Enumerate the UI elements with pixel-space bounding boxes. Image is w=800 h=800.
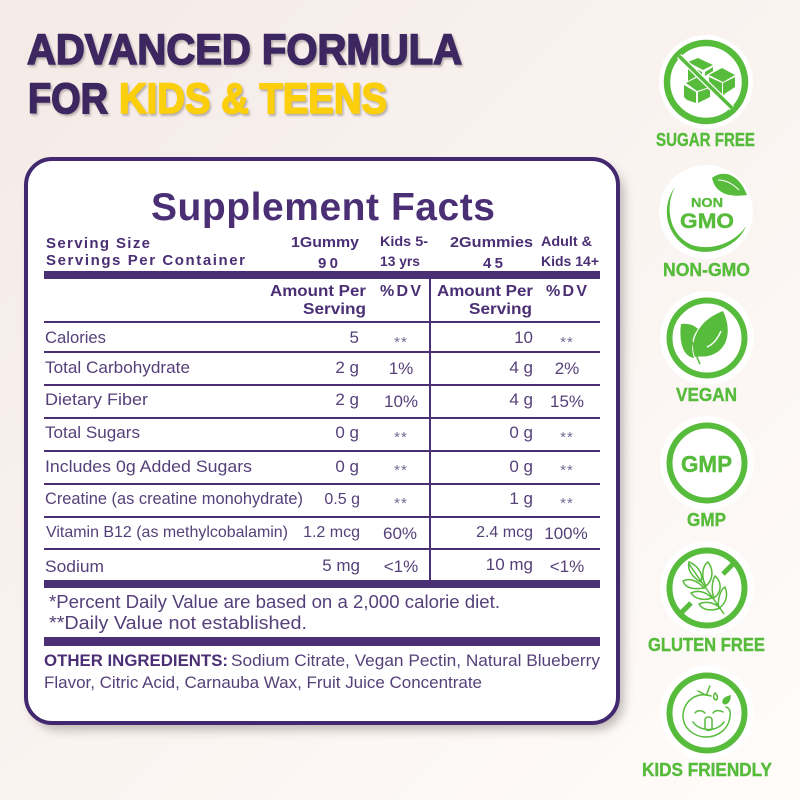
other ingredients: Sodium Citrate, Vegan Pectin, Natural Blueberry: [231, 651, 600, 670]
table rows: <1%: [384, 557, 418, 576]
table rows: **: [394, 495, 408, 512]
table rows: 4 g: [509, 358, 533, 377]
swoosh ring: [667, 187, 746, 252]
table rows: **: [560, 462, 574, 479]
title: FOR: [30, 77, 110, 125]
table rows: 1.2 mcg: [303, 524, 360, 541]
table rows: Total Carbohydrate: [45, 358, 190, 377]
icon: sugar cubes: [684, 58, 735, 103]
table rows: **: [394, 334, 408, 351]
column headers: Amount Per: [270, 283, 366, 300]
table rows: **: [560, 495, 574, 512]
panel: supplement facts: [26, 159, 624, 730]
serving header: 2Gummies: [450, 234, 533, 251]
label: NON-GMO: [663, 260, 750, 280]
table rows: 2 g: [335, 358, 359, 377]
serving header: [46, 233, 599, 272]
serving header: Adult &: [541, 233, 592, 249]
table rows: 60%: [383, 524, 417, 543]
table rows: 1 g: [509, 489, 533, 508]
serving header: 13 yrs: [380, 253, 420, 269]
title: ADVANCED FORMULA: [27, 26, 462, 74]
table rows: 0 g: [509, 423, 533, 442]
icon: baby face: [683, 686, 730, 737]
table rows: **: [394, 429, 408, 446]
serving header: Serving Size: [46, 235, 150, 252]
icon: leaves: [693, 311, 728, 357]
badge: sugar free: [656, 35, 755, 150]
table rows: 2.4 mcg: [476, 524, 533, 541]
table rows: 1%: [389, 359, 413, 378]
badge: non-gmo: GMO: [680, 210, 734, 233]
table rows: Creatine (as creatine monohydrate): [45, 489, 303, 508]
table rows: <1%: [550, 557, 584, 576]
table rows: 0.5 g: [324, 491, 360, 508]
label: GLUTEN FREE: [648, 635, 765, 655]
table rows: 0 g: [509, 457, 533, 476]
label: GMP: [687, 510, 726, 530]
serving header: Servings Per Container: [46, 252, 245, 269]
label: VEGAN: [676, 385, 737, 405]
column headers: [270, 283, 587, 318]
table rows: Dietary Fiber: [45, 390, 148, 409]
table rows: Total Sugars: [45, 423, 140, 442]
table rows: Sodium: [45, 557, 104, 576]
table rows: 0 g: [335, 423, 359, 442]
table rows: 4 g: [509, 390, 533, 409]
label: KIDS FRIENDLY: [642, 760, 772, 780]
serving header: Kids 14+: [541, 253, 599, 269]
other ingredients: OTHER INGREDIENTS:: [44, 651, 228, 670]
table rows: [45, 328, 588, 576]
title: ADVANCED FORMULA: [28, 28, 464, 76]
other ingredients: Flavor, Citric Acid, Carnauba Wax, Fruit Juice Concentrate: [44, 673, 482, 692]
column headers: Serving: [303, 301, 366, 318]
badge: non-gmo: [659, 165, 753, 280]
footnotes: **Daily Value not established.: [49, 613, 307, 633]
badge: kids friendly: [642, 666, 772, 780]
label: SUGAR FREE: [656, 130, 755, 150]
footnotes: [49, 592, 500, 633]
table rows: 2 g: [335, 390, 359, 409]
badge: non-gmo: NON: [691, 195, 723, 210]
title: [27, 26, 464, 125]
icon: wheat: [683, 562, 727, 614]
table rows: 5 mg: [322, 556, 360, 575]
column headers: %DV: [546, 283, 587, 300]
title: KIDS & TEENS: [119, 75, 387, 123]
table rows: 15%: [550, 392, 584, 411]
badge: gluten free: [648, 541, 765, 655]
table rules: [44, 271, 600, 646]
table rows: 100%: [544, 524, 588, 543]
heading: supplement facts: Supplement Facts: [151, 186, 495, 229]
table rows: 5: [350, 328, 359, 347]
column headers: Serving: [469, 301, 532, 318]
table rows: Includes 0g Added Sugars: [45, 457, 252, 476]
table rows: 0 g: [335, 457, 359, 476]
table rows: 2%: [555, 359, 579, 378]
footnotes: *Percent Daily Value are based on a 2,000 calorie diet.: [49, 592, 500, 612]
other ingredients: [44, 651, 600, 692]
column headers: Amount Per: [437, 283, 533, 300]
icon: leaf: [712, 174, 747, 196]
serving header: 1Gummy: [291, 234, 360, 251]
column headers: %DV: [380, 283, 421, 300]
badge: gmp: [660, 416, 754, 530]
badge: vegan: [660, 291, 754, 405]
title: FOR: [28, 75, 108, 123]
serving header: 90: [318, 255, 338, 272]
table rows: Calories: [45, 328, 106, 347]
serving header: Kids 5-: [380, 233, 428, 249]
table rows: 10: [514, 328, 533, 347]
table rows: 10%: [384, 392, 418, 411]
serving header: 45: [483, 255, 503, 272]
table rows: **: [394, 462, 408, 479]
table rows: Vitamin B12 (as methylcobalamin): [46, 524, 288, 541]
table rows: **: [560, 429, 574, 446]
table rows: 10 mg: [486, 555, 533, 574]
table rows: **: [560, 334, 574, 351]
title: KIDS & TEENS: [120, 77, 388, 125]
badge: gmp: GMP: [681, 451, 732, 477]
